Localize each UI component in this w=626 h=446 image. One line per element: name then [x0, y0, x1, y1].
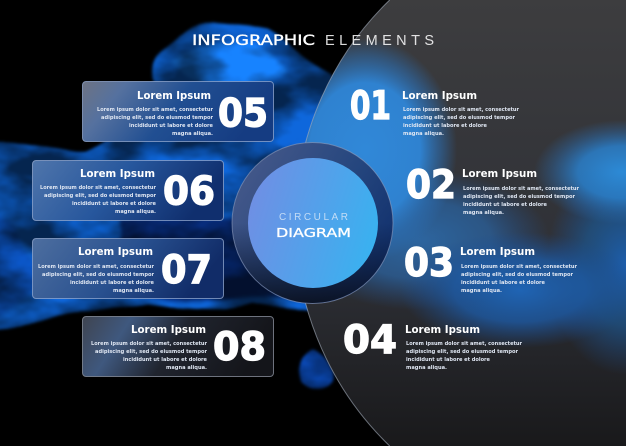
item 03: 03	[404, 241, 454, 286]
item 02: magna aliqua.	[463, 210, 504, 216]
blue glow blobs	[306, 40, 626, 370]
item 01: incididunt ut labore et dolore	[403, 123, 487, 129]
panel 08	[82, 316, 274, 376]
item 03: Lorem ipsum dolor sit amet, consectetur	[461, 264, 577, 270]
item 04: 04	[343, 318, 397, 363]
glass circle edge	[295, 0, 390, 446]
item 02	[406, 163, 579, 216]
centre label	[276, 212, 351, 240]
panel 06: magna aliqua.	[115, 209, 156, 215]
panel 06: Lorem Ipsum	[80, 167, 155, 180]
panel 08: 08	[213, 325, 266, 370]
panel 07: Lorem ipsum dolor sit amet, consectetur	[38, 264, 154, 270]
centre label: CIRCULAR	[279, 212, 348, 223]
item 02: Lorem ipsum dolor sit amet, consectetur	[463, 186, 579, 192]
panel 05: 05	[218, 92, 268, 136]
panel 07: adipiscing elit, sed do eiusmod tempor	[42, 272, 154, 278]
panel 05: adipiscing elit, sed do eiusmod tempor	[101, 115, 213, 121]
panel 08: adipiscing elit, sed do eiusmod tempor	[95, 349, 207, 355]
panel 05: Lorem ipsum dolor sit amet, consectetur	[97, 107, 213, 113]
centre label: DIAGRAM	[276, 225, 351, 240]
panel 07: 07	[161, 248, 212, 293]
item 04: adipiscing elit, sed do eiusmod tempor	[406, 349, 518, 355]
item 04: incididunt ut labore et dolore	[406, 357, 490, 363]
panel 07: magna aliqua.	[113, 288, 154, 294]
panel 06: incididunt ut labore et dolore	[72, 201, 156, 207]
item 04: Lorem ipsum dolor sit amet, consectetur	[406, 341, 522, 347]
item 03: Lorem Ipsum	[460, 245, 535, 258]
panel 08: magna aliqua.	[166, 365, 207, 371]
blue ink smoke	[0, 22, 345, 389]
panel 05: Lorem Ipsum	[137, 89, 211, 102]
item 01: magna aliqua.	[403, 131, 444, 137]
item 01: Lorem Ipsum	[402, 89, 477, 102]
panel 07: incididunt ut labore et dolore	[70, 280, 154, 286]
item 02: adipiscing elit, sed do eiusmod tempor	[463, 194, 575, 200]
item 04: magna aliqua.	[406, 365, 447, 371]
title: ELEMENTS	[325, 33, 434, 49]
panel 08: incididunt ut labore et dolore	[123, 357, 207, 363]
item 04	[343, 318, 522, 371]
panel 06: 06	[163, 170, 215, 214]
panel 07: Lorem Ipsum	[78, 245, 153, 258]
item 01: Lorem ipsum dolor sit amet, consectetur	[403, 107, 519, 113]
panel 08: Lorem ipsum dolor sit amet, consectetur	[91, 341, 207, 347]
panel 06: Lorem ipsum dolor sit amet, consectetur	[40, 185, 156, 191]
panel 07	[32, 238, 224, 298]
central circular diagram	[232, 142, 393, 304]
item 03: adipiscing elit, sed do eiusmod tempor	[461, 272, 573, 278]
item 01: adipiscing elit, sed do eiusmod tempor	[403, 115, 515, 121]
item 01	[350, 84, 519, 137]
item 01: 01	[350, 84, 391, 129]
large glass circle	[290, 0, 626, 446]
inner disc	[248, 158, 378, 288]
panel 06: adipiscing elit, sed do eiusmod tempor	[44, 193, 156, 199]
item 02: Lorem Ipsum	[462, 167, 537, 180]
panel 06	[32, 160, 224, 220]
panel 05: incididunt ut labore et dolore	[129, 123, 213, 129]
item 03: incididunt ut labore et dolore	[461, 280, 545, 286]
item 02: incididunt ut labore et dolore	[463, 202, 547, 208]
item 03	[404, 241, 577, 294]
outer ring	[232, 142, 393, 304]
title	[192, 33, 434, 49]
panel 05: magna aliqua.	[172, 131, 213, 137]
title: INFOGRAPHIC	[192, 33, 315, 49]
panel 08: Lorem Ipsum	[131, 323, 206, 336]
panel 05	[82, 82, 274, 142]
item 02: 02	[406, 163, 456, 208]
item 04: Lorem Ipsum	[405, 323, 480, 336]
item 03: magna aliqua.	[461, 288, 502, 294]
